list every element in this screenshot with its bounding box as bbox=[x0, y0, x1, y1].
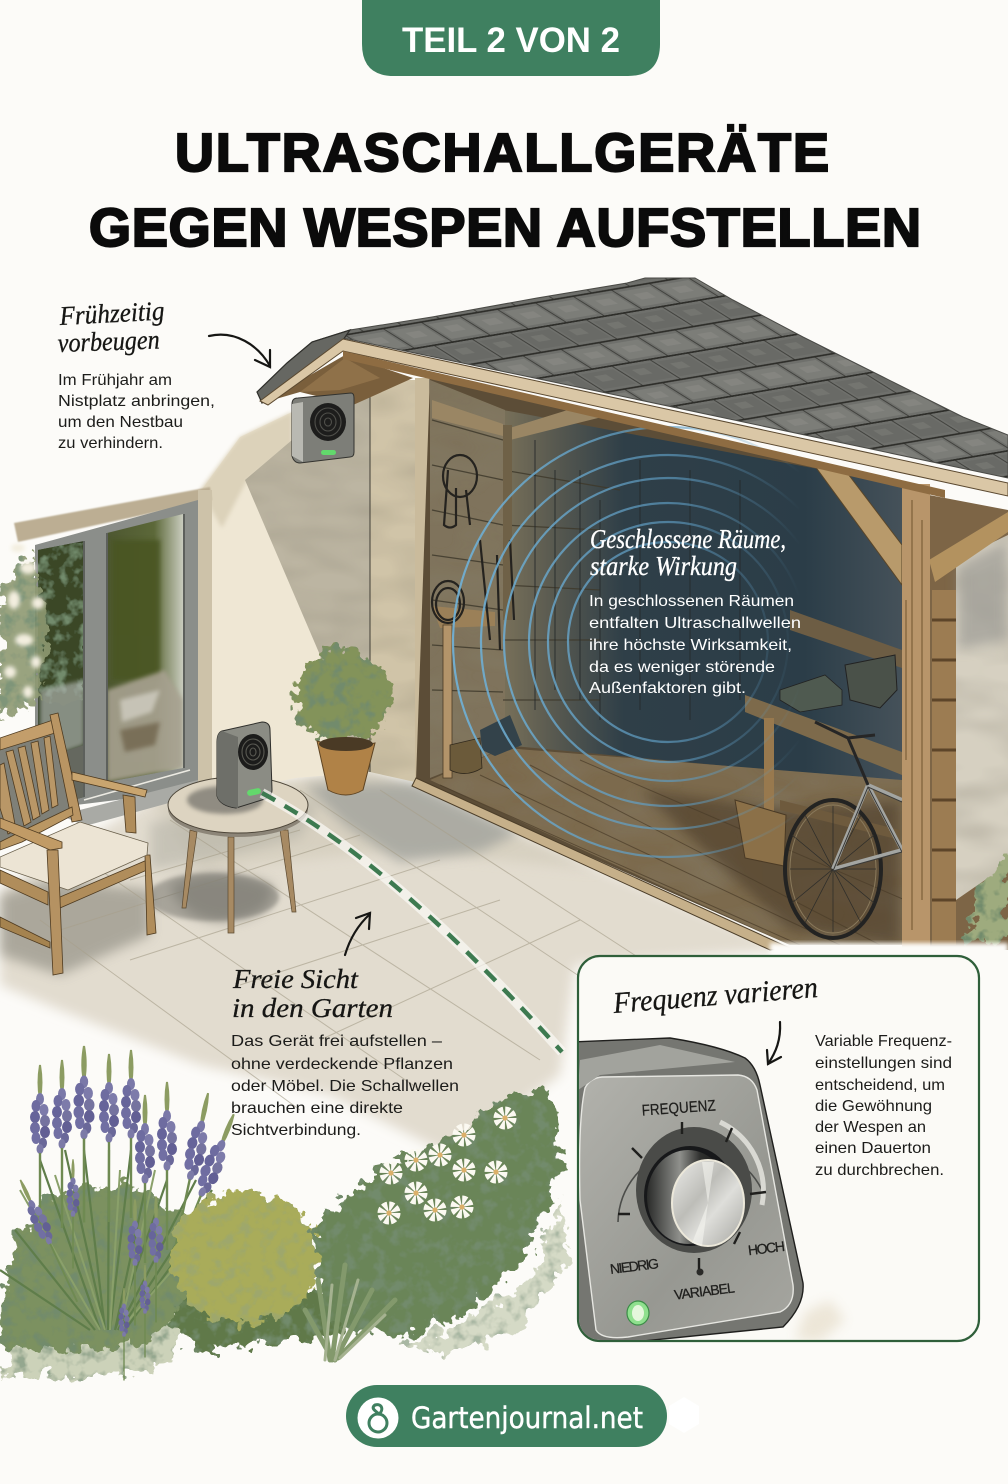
text: frequency description bbox=[815, 1033, 952, 1179]
callout: Geschlossene Räume: entfalten Ultraschallwellen bbox=[589, 615, 801, 632]
callout: Frühzeitig vorbeugen: um den Nestbau bbox=[58, 414, 183, 431]
header pill bbox=[362, 0, 660, 76]
title: GEGEN WESPEN AUFSTELLEN bbox=[89, 198, 921, 258]
callout: Geschlossene Räume: Geschlossene Räume, bbox=[590, 524, 786, 554]
decorative faint badge bbox=[669, 1397, 699, 1433]
dial labels: VARIABEL bbox=[673, 1279, 736, 1303]
callout: Frühzeitig vorbeugen: Nistplatz anbringen, bbox=[58, 393, 215, 410]
illustration: wooden armchair bbox=[0, 713, 156, 975]
callout: Geschlossene Räume: da es weniger störende bbox=[589, 659, 775, 676]
illustration: climbing blossoms bbox=[0, 544, 48, 720]
indicator light bbox=[627, 1301, 649, 1325]
heading: Frequenz varieren: Frequenz varieren bbox=[611, 971, 819, 1020]
callout: Freie Sicht in den Garten: in den Garten bbox=[232, 993, 393, 1023]
text: frequency description: Variable Frequenz- bbox=[815, 1033, 952, 1050]
callout: Freie Sicht in den Garten: Sichtverbindung. bbox=[231, 1122, 361, 1139]
illustration: bicycle bbox=[785, 722, 902, 938]
callout: Freie Sicht in den Garten: oder Möbel. Die Schallwellen bbox=[231, 1078, 459, 1095]
illustration: flowering shrub bbox=[305, 1090, 568, 1360]
callout: Freie Sicht in den Garten: brauchen eine direkte bbox=[231, 1100, 403, 1117]
illustration: potted plant bbox=[292, 649, 392, 795]
callout: Frühzeitig vorbeugen: Im Frühjahr am bbox=[58, 372, 172, 389]
illustration: tiled roof bbox=[257, 278, 1008, 498]
callout: Frühzeitig vorbeugen: vorbeugen bbox=[57, 324, 160, 358]
logo icon bbox=[358, 1398, 398, 1438]
dial labels: FREQUENZ bbox=[641, 1097, 716, 1120]
title bbox=[89, 123, 921, 258]
device: wall-mounted ultrasonic unit bbox=[292, 393, 354, 463]
callout: Geschlossene Räume: starke Wirkung bbox=[590, 551, 737, 581]
illustration: shed interior bbox=[416, 378, 930, 945]
callout: Geschlossene Räume: ihre höchste Wirksamkeit, bbox=[589, 637, 792, 654]
callout: Frühzeitig vorbeugen: zu verhindern. bbox=[58, 435, 163, 452]
illustration: sliding window bbox=[14, 487, 212, 826]
title: ULTRASCHALLGERÄTE bbox=[175, 123, 829, 183]
text: frequency description: entscheidend, um bbox=[815, 1077, 945, 1094]
header pill: TEIL 2 VON 2 bbox=[402, 21, 620, 60]
dial labels: NIEDRIG bbox=[609, 1255, 660, 1277]
device close-up: frequency dial bbox=[570, 1038, 845, 1345]
dial scale bbox=[618, 1122, 766, 1276]
dial labels: HOCH bbox=[747, 1238, 786, 1258]
text: frequency description: der Wespen an bbox=[815, 1119, 926, 1136]
callout: Frühzeitig vorbeugen bbox=[57, 296, 215, 452]
callout: Geschlossene Räume: Außenfaktoren gibt. bbox=[589, 680, 746, 697]
arrow: to line of sight bbox=[345, 913, 370, 955]
text: frequency description: einstellungen sind bbox=[815, 1055, 952, 1072]
device: table ultrasonic unit bbox=[217, 722, 272, 808]
callout: Geschlossene Räume bbox=[589, 524, 801, 697]
illustration: terrace floor bbox=[0, 770, 790, 1155]
callout: Frühzeitig vorbeugen: Frühzeitig bbox=[58, 296, 165, 331]
icon: hanging hose coils bbox=[432, 455, 514, 650]
callout: Freie Sicht in den Garten: ohne verdeckende Pflanzen bbox=[231, 1056, 453, 1073]
dial knob bbox=[672, 1160, 744, 1246]
dashed line of sight bbox=[262, 793, 562, 1052]
callout: Freie Sicht in den Garten: Das Gerät frei aufstellen – bbox=[231, 1033, 442, 1050]
text: frequency description: zu durchbrechen. bbox=[815, 1162, 944, 1179]
illustration: wooden post and side wall bbox=[412, 462, 1008, 950]
text: frequency description: die Gewöhnung bbox=[815, 1098, 932, 1115]
illustration: side table bbox=[147, 777, 308, 933]
callout: Geschlossene Räume: In geschlossenen Räumen bbox=[589, 593, 794, 610]
illustration: sound wave rings bbox=[453, 427, 883, 857]
footer pill: Gartenjournal.net bbox=[411, 1401, 643, 1435]
illustration: yellow-green shrub bbox=[170, 1192, 320, 1324]
footer pill bbox=[346, 1385, 667, 1447]
paper fade under the shed bbox=[770, 943, 1008, 957]
illustration: lavender bed bbox=[0, 1046, 345, 1380]
panel: Frequenz varieren bbox=[570, 956, 979, 1345]
arrow: to wall device bbox=[209, 335, 270, 367]
text: frequency description: einen Dauerton bbox=[815, 1140, 931, 1157]
callout: Freie Sicht in den Garten bbox=[231, 964, 459, 1139]
callout: Freie Sicht in den Garten: Freie Sicht bbox=[232, 964, 360, 994]
illustration: corner shrub bbox=[968, 860, 1008, 940]
illustration: house wall bbox=[200, 378, 430, 800]
dial labels bbox=[609, 1097, 786, 1303]
arrow: to device bbox=[767, 1022, 781, 1064]
